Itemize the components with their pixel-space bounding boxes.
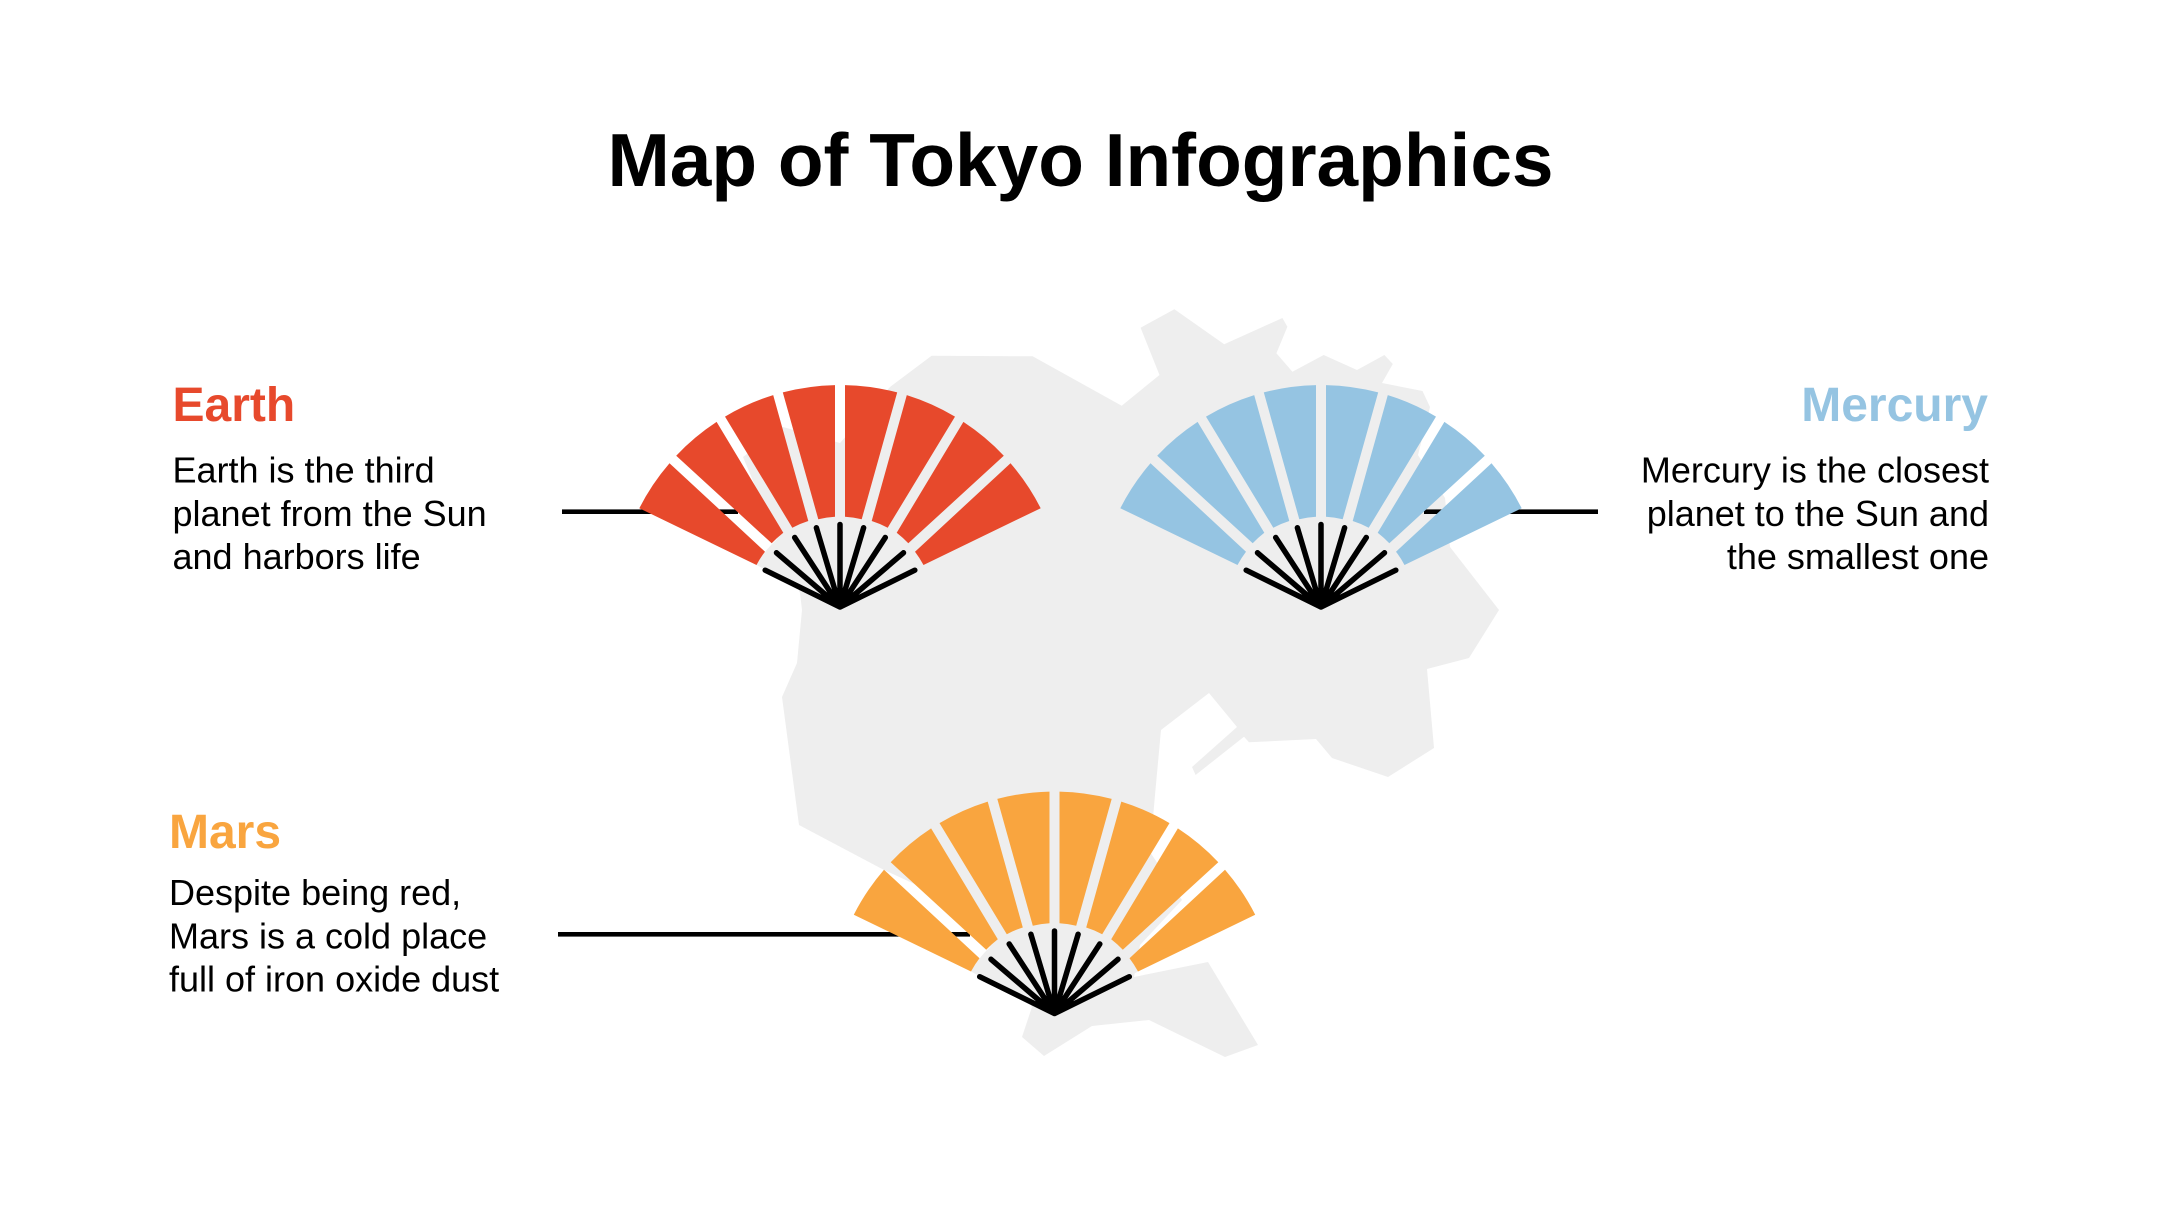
description: Mars: Mars is a cold place: [169, 915, 487, 956]
description: Mercury: planet to the Sun and: [1647, 493, 1989, 534]
description: Mercury: the smallest one: [1727, 536, 1989, 577]
description: Mercury: Mercury is the closest: [1641, 450, 1989, 490]
fan: Mars: [854, 792, 1255, 1016]
description: Earth: planet from the Sun: [172, 493, 487, 534]
text block: Mars: [169, 806, 499, 1000]
description: Earth: and harbors life: [172, 536, 421, 577]
connector line: Earth: [562, 509, 738, 514]
description: Earth: Earth is the third: [172, 450, 435, 490]
fan: Earth: [639, 385, 1041, 610]
connector line: Mercury: [1424, 509, 1598, 514]
text block: Earth: [172, 379, 487, 577]
heading: Mercury: Mercury: [1801, 379, 1988, 432]
heading: Mars: Mars: [169, 806, 281, 859]
background map of Tokyo: [743, 309, 1499, 1057]
connector line: Mars: [558, 932, 970, 937]
description: Mars: Despite being red,: [169, 872, 461, 913]
fan: Mercury: [1120, 385, 1522, 610]
title: Map of Tokyo Infographics: [607, 118, 1554, 202]
heading: Earth: Earth: [172, 379, 295, 432]
text block: Mercury: [1641, 379, 1989, 577]
description: Mars: full of iron oxide dust: [169, 959, 499, 1000]
